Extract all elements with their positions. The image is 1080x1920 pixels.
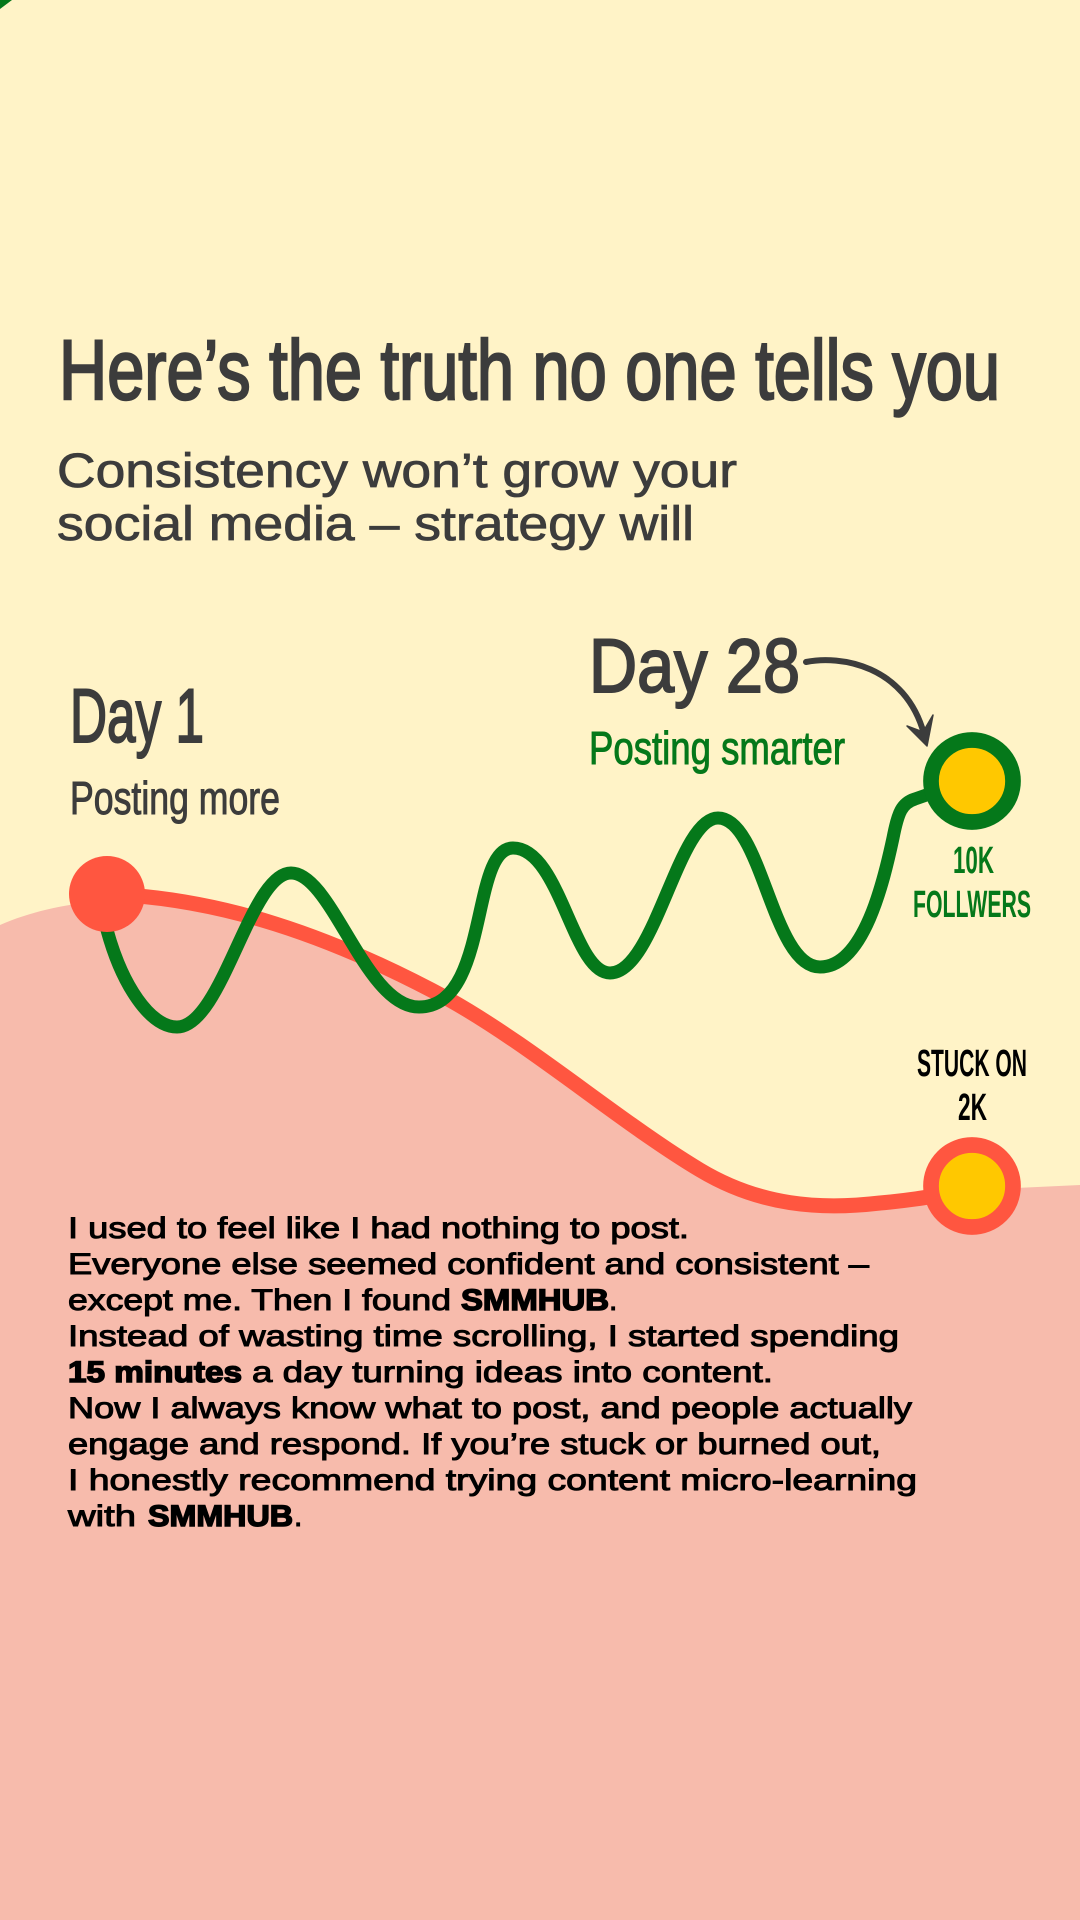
body text: a day turning ideas into content. bbox=[252, 1356, 773, 1389]
body text: . bbox=[294, 1500, 302, 1533]
red end node bbox=[931, 1145, 1013, 1227]
start node bbox=[69, 856, 145, 932]
body text: 15 minutes bbox=[68, 1356, 242, 1389]
label: 10k followers: 10K bbox=[953, 840, 994, 882]
body text bbox=[67, 1212, 917, 1533]
body text: Now I always know what to post, and people actually bbox=[68, 1392, 912, 1425]
subtitle bbox=[57, 445, 737, 551]
body text: SMMHUB bbox=[148, 1500, 293, 1533]
body text: Everyone else seemed confident and consistent – bbox=[68, 1248, 869, 1281]
label: stuck on 2k bbox=[917, 1043, 1027, 1129]
label: day 1 bbox=[70, 674, 280, 824]
label: stuck on 2k: 2K bbox=[958, 1087, 987, 1129]
body text: . bbox=[609, 1284, 617, 1317]
label: day 28 bbox=[589, 624, 845, 774]
subtitle: Consistency won’t grow your bbox=[57, 445, 737, 498]
label: 10k followers bbox=[913, 840, 1031, 926]
body text: engage and respond. If you’re stuck or burned out, bbox=[68, 1428, 881, 1461]
label: day 28: Day 28 bbox=[589, 624, 800, 709]
body text: Instead of wasting time scrolling, I started spending bbox=[68, 1320, 899, 1353]
green end node bbox=[931, 740, 1013, 822]
body text: except me. Then I found bbox=[68, 1284, 451, 1317]
red declining line bbox=[107, 894, 972, 1206]
body text: I honestly recommend trying content micro-learning bbox=[68, 1464, 917, 1497]
corner accent bbox=[0, 0, 12, 9]
green growth line bbox=[107, 792, 935, 1027]
body text: SMMHUB bbox=[461, 1284, 609, 1317]
subtitle: social media – strategy will bbox=[57, 498, 694, 551]
body text: I used to feel like I had nothing to post. bbox=[68, 1212, 689, 1245]
label: day 1: Posting more bbox=[70, 772, 280, 824]
background: pink wave bbox=[0, 900, 1080, 1920]
label: day 1: Day 1 bbox=[70, 674, 204, 759]
label: day 28: Posting smarter bbox=[589, 722, 845, 774]
body text: with bbox=[67, 1500, 136, 1533]
arrow: day 28 to green node bbox=[806, 660, 933, 746]
